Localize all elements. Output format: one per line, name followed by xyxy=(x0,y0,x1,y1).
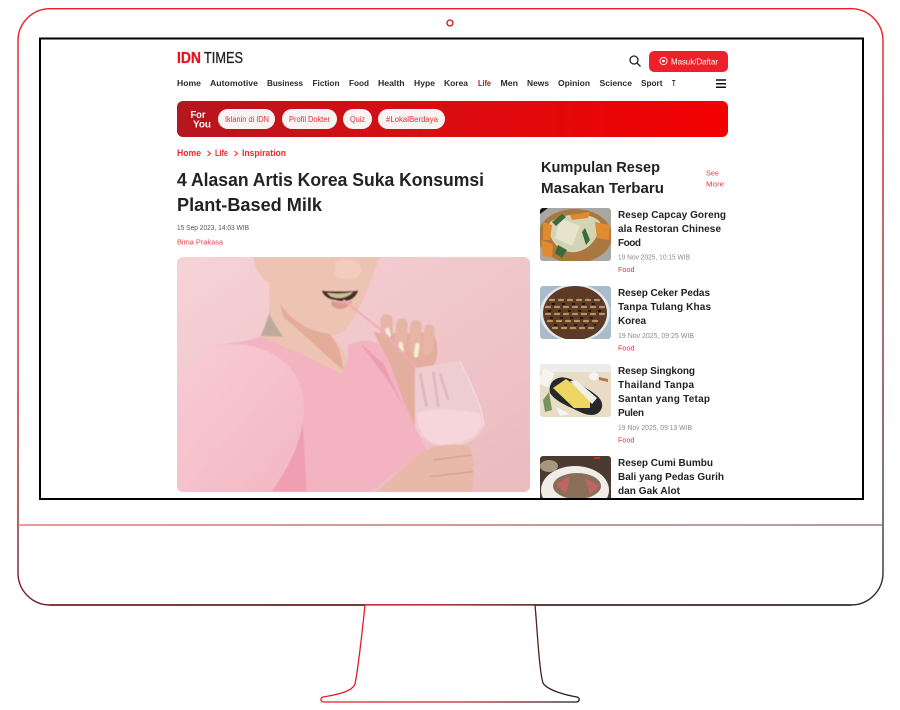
recipe card 2: 19 Nov 2025, 09:25 WIB xyxy=(618,331,694,340)
breadcrumb xyxy=(178,150,286,158)
search icon xyxy=(630,56,640,66)
navigation: Hype xyxy=(414,78,435,88)
navigation xyxy=(178,80,676,88)
for you bar: For xyxy=(190,109,206,121)
recipe card 3: 19 Nov 2025, 09:13 WIB xyxy=(618,423,692,432)
thumbnail: singkong xyxy=(537,364,611,417)
recipe card 1: Food xyxy=(618,265,634,274)
for you bar xyxy=(177,101,728,137)
navigation: Food xyxy=(349,78,369,88)
navigation: News xyxy=(527,78,549,88)
navigation: Automotive xyxy=(210,78,258,88)
recipe card 1 xyxy=(538,208,726,274)
recipe card 1: 19 Nov 2025, 10:15 WIB xyxy=(618,252,690,262)
recipe card 4: dan Gak Alot xyxy=(618,486,681,497)
thumbnail: ceker pedas xyxy=(540,284,611,342)
monitor stand xyxy=(321,605,579,702)
recipe card 3: Pulen xyxy=(618,408,644,419)
for you bar: Quiz xyxy=(350,115,365,124)
logo: TIMES xyxy=(204,50,243,67)
thumbnail: capcay xyxy=(538,208,612,263)
recipe card 3: Food xyxy=(618,436,634,444)
hamburger menu icon xyxy=(716,80,726,87)
for you bar: #LokalBerdaya xyxy=(386,115,439,124)
lower hand xyxy=(377,444,474,492)
article author: Bima Prakasa xyxy=(177,238,224,246)
recipe card 2 xyxy=(540,284,711,352)
navigation: T xyxy=(672,78,676,88)
recipe card 2: Tanpa Tulang Khas xyxy=(618,302,711,313)
recipe card 2: Resep Ceker Pedas xyxy=(618,288,710,299)
recipe card 3 xyxy=(537,364,710,444)
navigation: Health xyxy=(378,78,404,88)
see more link: See xyxy=(706,168,719,178)
login button: Masuk/Daftar xyxy=(671,56,718,66)
breadcrumb: Life xyxy=(215,148,228,158)
for you bar: You xyxy=(193,118,211,130)
thumbnail: cumi bumbu bali xyxy=(540,456,611,498)
recipe card 3: Resep Singkong xyxy=(618,366,695,377)
navigation: Science xyxy=(600,78,632,88)
blouse xyxy=(177,337,427,492)
neck and face xyxy=(253,257,380,375)
sidebar heading xyxy=(542,161,663,193)
recipe card 1: Resep Capcay Goreng xyxy=(618,210,726,221)
sidebar heading: Masakan Terbaru xyxy=(541,180,664,197)
sidebar heading: Kumpulan Resep xyxy=(541,159,660,176)
article title: 4 Alasan Artis Korea Suka Konsumsi xyxy=(177,170,484,190)
recipe card 3: Thailand Tanpa xyxy=(618,380,694,391)
navigation: Opinion xyxy=(558,78,590,88)
recipe card 2: Food xyxy=(618,344,634,352)
recipe card 1: Food xyxy=(618,238,641,249)
for you bar: Profil Dokter xyxy=(289,115,330,124)
recipe card 2: Korea xyxy=(618,316,646,327)
logo xyxy=(178,52,243,64)
screen border xyxy=(40,38,863,499)
recipe card 4: Bali yang Pedas Gurih xyxy=(618,472,724,483)
navigation: Business xyxy=(267,78,303,88)
breadcrumb: Inspiration xyxy=(242,148,286,158)
camera dot xyxy=(447,20,453,26)
screen content xyxy=(177,50,728,514)
see more link: More xyxy=(706,180,724,188)
recipe card 3: Santan yang Tetap xyxy=(618,394,710,405)
login button xyxy=(649,51,728,72)
logo: IDN xyxy=(177,50,201,67)
article title xyxy=(177,172,483,211)
navigation: Fiction xyxy=(312,78,340,88)
article title: Plant-Based Milk xyxy=(177,195,323,215)
navigation: Korea xyxy=(444,78,468,88)
navigation: Life xyxy=(478,78,491,88)
article date: 15 Sep 2023, 14:03 WIB xyxy=(177,223,249,232)
navigation: Sport xyxy=(641,78,663,88)
recipe card 4 xyxy=(540,456,724,498)
recipe card 4: Resep Cumi Bumbu xyxy=(618,458,713,469)
recipe card 1: ala Restoran Chinese xyxy=(618,224,721,235)
article photo: woman drinking plant-based milk xyxy=(177,257,530,492)
see more link xyxy=(706,170,724,186)
hand with straw xyxy=(373,332,438,427)
navigation: Men xyxy=(500,78,518,88)
navigation: Home xyxy=(177,78,201,88)
for you bar: Iklanin di IDN xyxy=(225,115,269,124)
breadcrumb: Home xyxy=(177,148,201,158)
wine glass with milk xyxy=(415,361,483,447)
